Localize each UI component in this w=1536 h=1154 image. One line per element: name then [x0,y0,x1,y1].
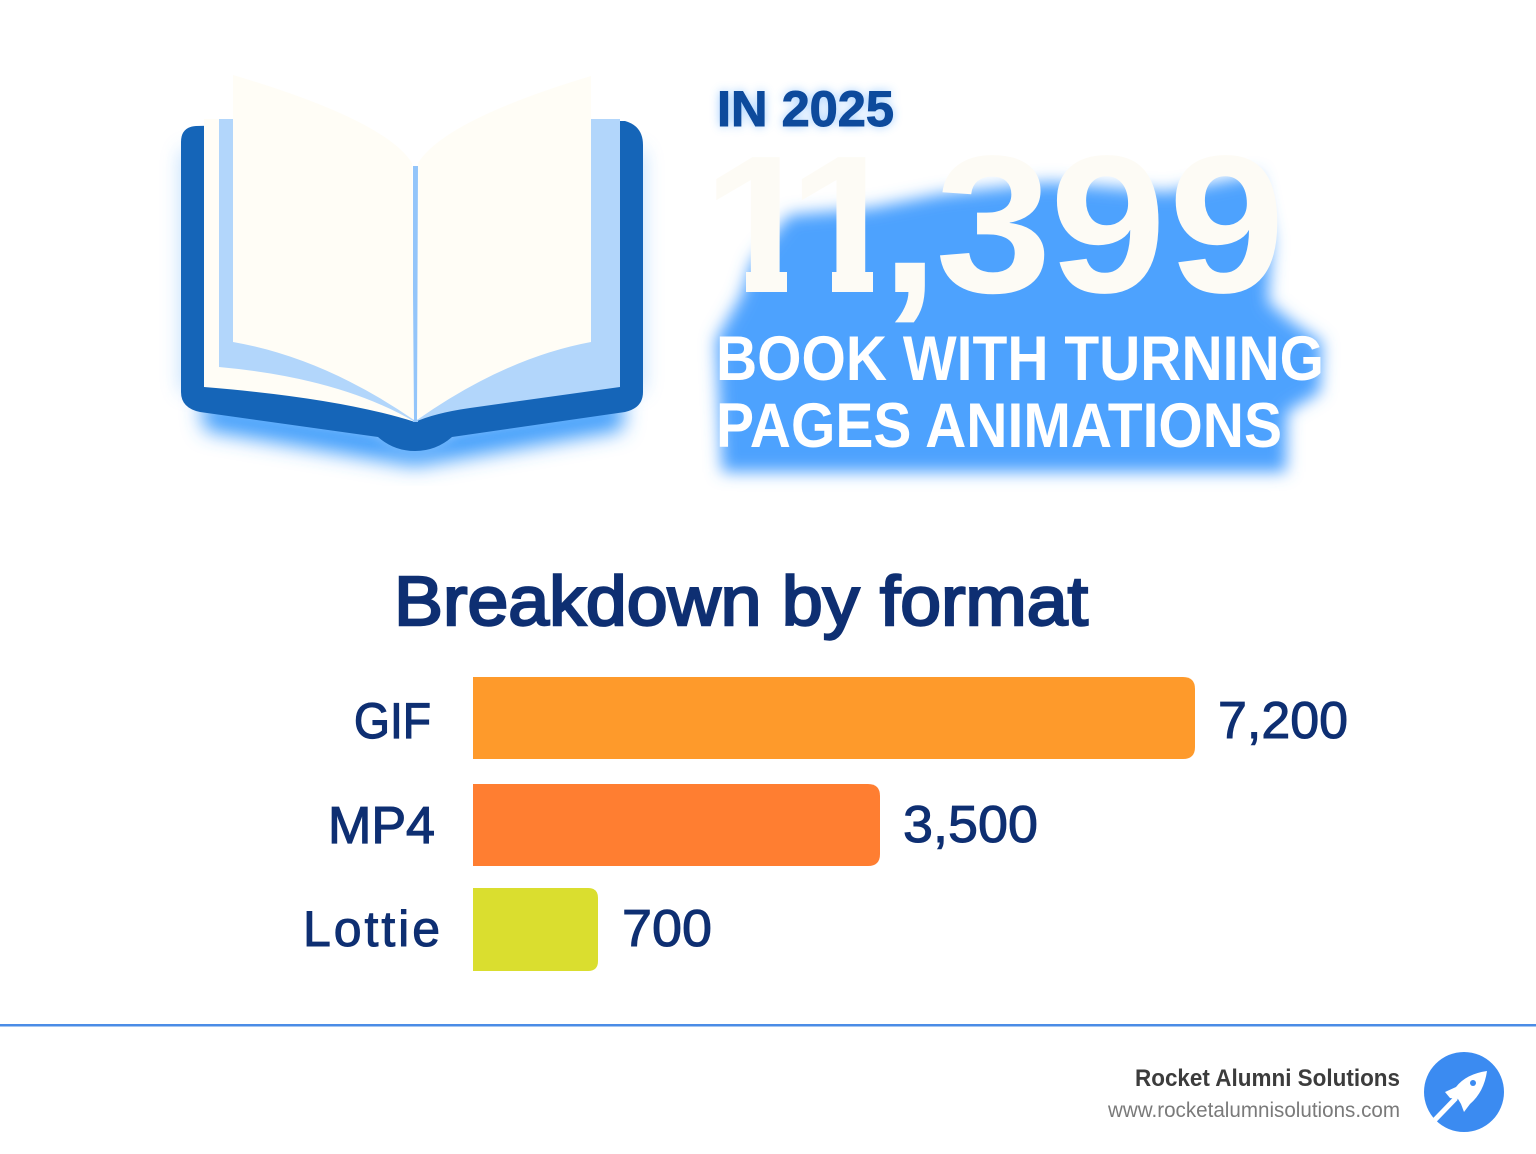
bar row: GIF [354,677,1348,759]
big number: 11,399: 11 [702,115,904,334]
bar row: MP4: MP4 [328,797,435,855]
icon: open book [181,75,643,466]
bar row: MP4 [328,784,1038,866]
big number: 11,399: ,399 [881,115,1285,334]
headline: book with turning pages animations: PAGES ANIMATIONS [716,391,1282,461]
blue glow behind headline [716,174,1322,472]
footer brand text [1107,1065,1400,1122]
bar chart: breakdown by format [303,677,1348,971]
bar row: Lottie: Lottie [303,901,440,957]
bar row: Lottie: 700 [622,900,712,958]
bar row: GIF: 7,200 [1218,692,1348,750]
bar row: Lottie [303,888,712,971]
icon: rocket logo [1424,1052,1504,1132]
footer divider [0,1024,1536,1026]
footer brand text: www.rocketalumnisolutions.com [1107,1099,1400,1122]
bar row: MP4: 3,500 [903,796,1038,854]
heading: in 2025: IN 2025 [717,81,894,137]
headline: book with turning pages animations [716,324,1324,461]
chart title: Breakdown by format [394,562,1088,640]
headline: book with turning pages animations: BOOK WITH TURNING [716,324,1324,394]
footer brand text: Rocket Alumni Solutions [1135,1065,1400,1092]
bar row: GIF: GIF [354,693,431,749]
big number: 11,399 [716,156,1278,322]
heading: in 2025: IN 2025 [717,81,894,137]
